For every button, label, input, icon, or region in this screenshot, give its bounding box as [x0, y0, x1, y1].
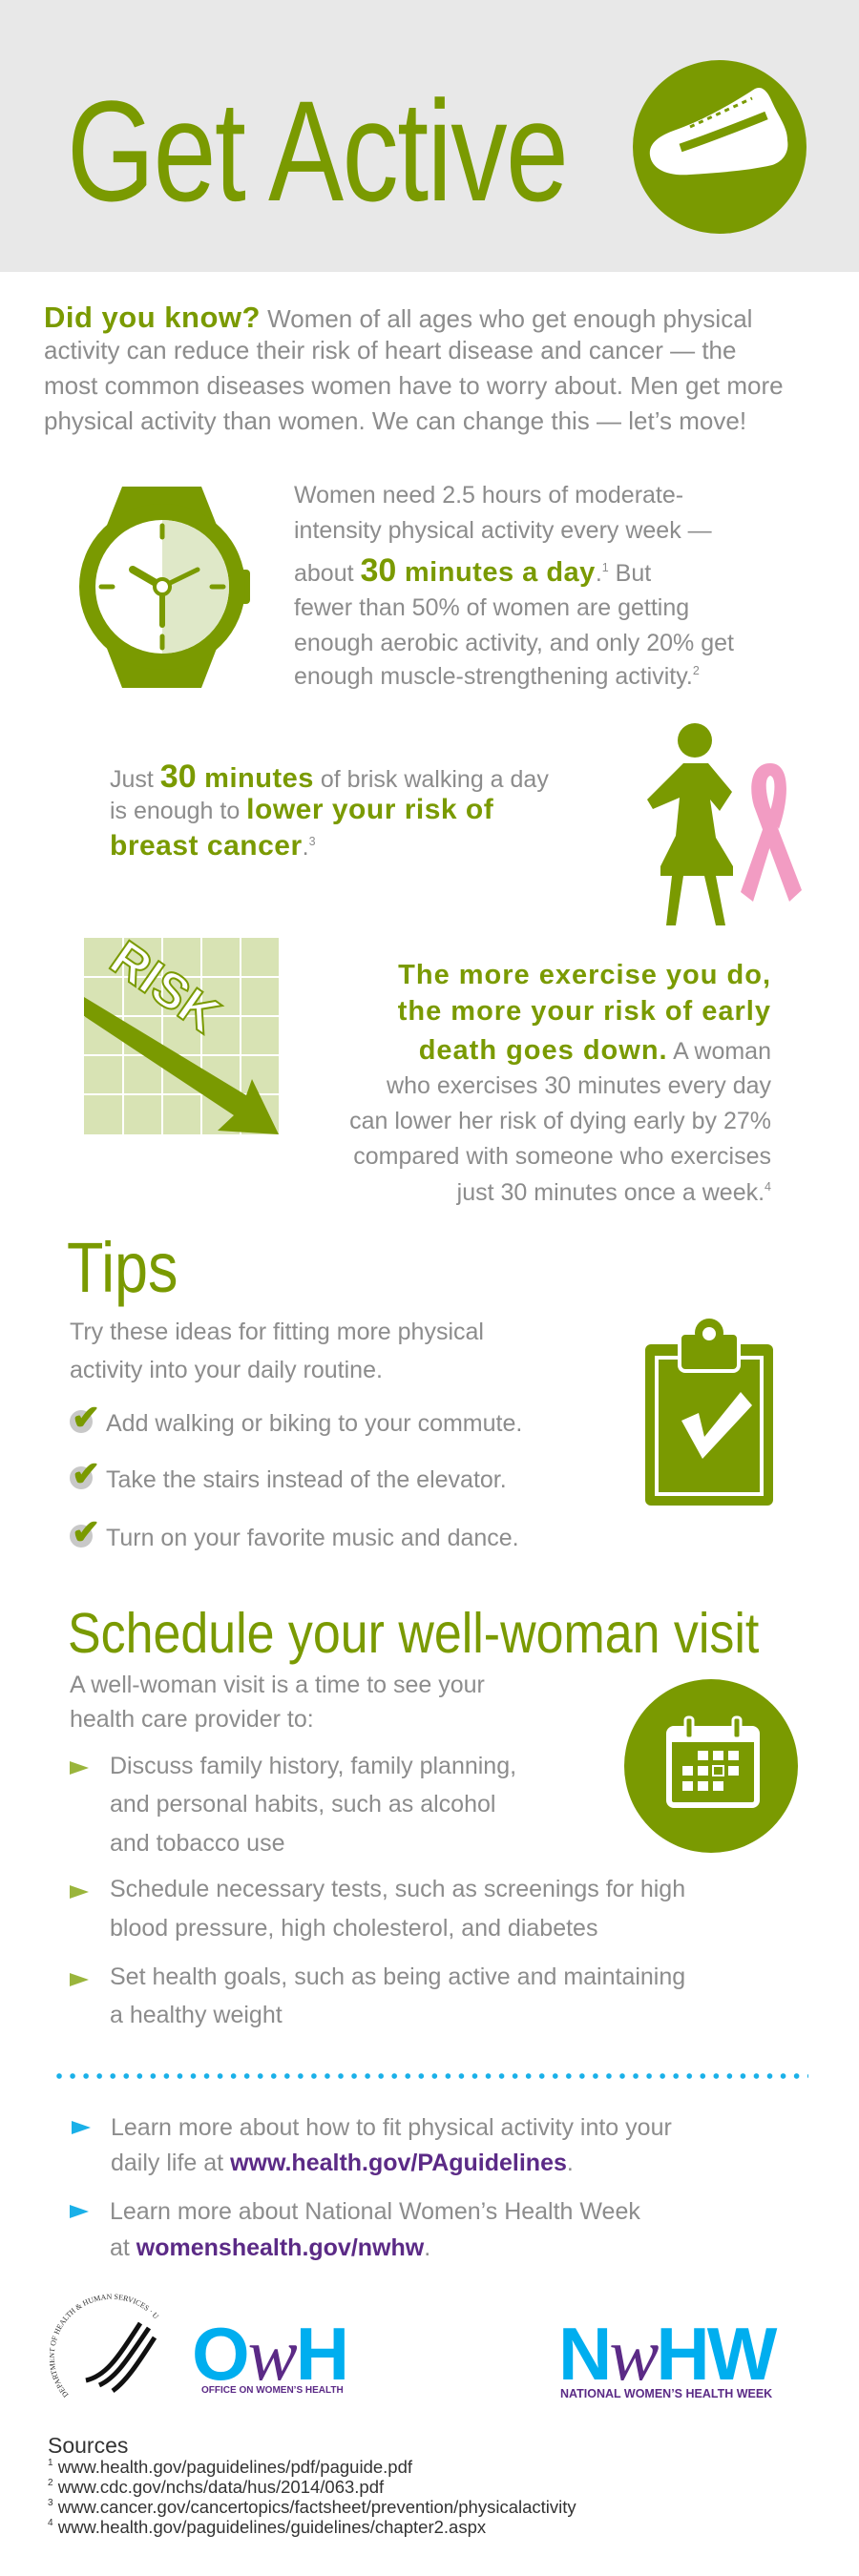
- icon: walking woman: [647, 723, 733, 925]
- logo: NWHW: NwHW: [558, 2312, 774, 2396]
- text: risk goes down: just 30 minutes once a week.4: [457, 1179, 771, 1206]
- text: breast cancer: breast cancer.3: [110, 830, 316, 862]
- sources: 3 www.cancer.gov/cancertopics/factsheet/prevention/physicalactivity: [48, 2497, 576, 2517]
- text: breast cancer: Just 30 minutes of brisk walking a day: [110, 758, 549, 795]
- link 2: Learn more about National Women’s Health Week: [110, 2198, 640, 2225]
- text: 30 minutes a day: Women need 2.5 hours of moderate-: [294, 482, 683, 509]
- tip 3: Turn on your favorite music and dance.: [106, 1525, 519, 1551]
- icon: pink ribbon: [741, 763, 802, 902]
- well-woman list: [70, 1672, 685, 2028]
- text: risk goes down: the more your risk of early: [398, 996, 771, 1027]
- tip 1: Add walking or biking to your commute.: [106, 1410, 522, 1437]
- icon: watch: [79, 487, 250, 688]
- learn more links: [70, 2114, 672, 2261]
- icon: calendar circle: [624, 1679, 798, 1853]
- bullet 1: and tobacco use: [110, 1830, 284, 1857]
- tip 2: Take the stairs instead of the elevator.: [106, 1466, 507, 1493]
- header band: [0, 0, 859, 272]
- sources: [48, 2433, 576, 2537]
- link 1: [72, 2114, 672, 2176]
- tip 1: [70, 1398, 522, 1437]
- sources: 1 www.health.gov/paguidelines/pdf/paguide.pdf: [48, 2457, 412, 2477]
- bullet 1: Discuss family history, family planning,: [110, 1753, 516, 1779]
- bullet 3: a healthy weight: [110, 2002, 283, 2028]
- heading: Tips: Tips: [67, 1228, 178, 1307]
- tips list: activity into your daily routine.: [70, 1357, 383, 1383]
- text: 30 minutes a day: [294, 482, 734, 690]
- tip 2: ✔: [72, 1454, 100, 1493]
- bullet 2: blood pressure, high cholesterol, and diabetes: [110, 1915, 597, 1942]
- text: risk goes down: compared with someone who exercises: [353, 1143, 771, 1170]
- text: 30 minutes a day: fewer than 50% of women are getting: [294, 594, 689, 621]
- text: 30 minutes a day: about 30 minutes a day.1 But: [294, 552, 651, 589]
- logo: OWH: OwH: [192, 2312, 347, 2396]
- icon: clipboard: [645, 1319, 773, 1506]
- sources: 4 www.health.gov/paguidelines/guidelines/chapter2.aspx: [48, 2517, 486, 2537]
- text: breast cancer: [110, 758, 549, 862]
- tips list: [70, 1319, 522, 1551]
- text: risk goes down: [349, 960, 771, 1206]
- tip 3: [70, 1512, 519, 1551]
- bullet 1: and personal habits, such as alcohol: [110, 1791, 495, 1818]
- text: 30 minutes a day: intensity physical activity every week —: [294, 517, 712, 544]
- link 1: Learn more about how to fit physical activity into your: [111, 2114, 672, 2141]
- sources: Sources: [48, 2433, 128, 2458]
- logo: NWHW: NATIONAL WOMEN’S HEALTH WEEK: [560, 2387, 772, 2400]
- text: 30 minutes a day: enough aerobic activity, and only 20% get: [294, 630, 734, 656]
- link 2: [70, 2198, 640, 2261]
- bullet 1: [70, 1753, 516, 1857]
- logo: OWH: OFFICE ON WOMEN’S HEALTH: [201, 2385, 344, 2396]
- intro: did you know: [44, 301, 784, 435]
- bullet 3: Set health goals, such as being active and maintaining: [110, 1963, 685, 1990]
- bullet 3: [70, 1963, 685, 2028]
- well-woman list: health care provider to:: [70, 1706, 314, 1733]
- tip 2: [70, 1454, 507, 1493]
- text: risk goes down: who exercises 30 minutes every day: [387, 1072, 771, 1099]
- link 2: at womenshealth.gov/nwhw.: [110, 2234, 430, 2261]
- link 1: daily life at www.health.gov/PAguidelines.: [111, 2150, 574, 2176]
- intro: did you know: Did you know? Women of all ages who get enough physical: [44, 301, 752, 334]
- tip 3: ✔: [72, 1512, 100, 1551]
- well-woman list: A well-woman visit is a time to see your: [70, 1672, 485, 1698]
- intro: did you know: most common diseases women have to worry about. Men get more: [44, 371, 784, 400]
- text: 30 minutes a day: enough muscle-strengthening activity.2: [294, 663, 700, 690]
- sources: 2 www.cdc.gov/nchs/data/hus/2014/063.pdf: [48, 2477, 384, 2497]
- bullet 2: [70, 1876, 685, 1942]
- text: breast cancer: is enough to lower your risk of: [110, 794, 493, 825]
- icon: risk chart: [84, 938, 279, 1134]
- tips list: Try these ideas for fitting more physical: [70, 1319, 484, 1345]
- bullet 2: Schedule necessary tests, such as screenings for high: [110, 1876, 685, 1902]
- text: risk goes down: death goes down. A woman: [419, 1035, 771, 1066]
- tip 1: ✔: [72, 1398, 100, 1437]
- title: Get Active: [67, 71, 567, 231]
- text: risk goes down: The more exercise you do,: [398, 960, 771, 990]
- intro: did you know: physical activity than women. We can change this — let’s move!: [44, 406, 746, 435]
- icon: shoe circle: [633, 60, 807, 234]
- intro: did you know: activity can reduce their risk of heart disease and cancer — the: [44, 336, 736, 364]
- heading: schedule: Schedule your well-woman visit: [68, 1602, 759, 1665]
- text: risk goes down: can lower her risk of dying early by 27%: [349, 1108, 771, 1134]
